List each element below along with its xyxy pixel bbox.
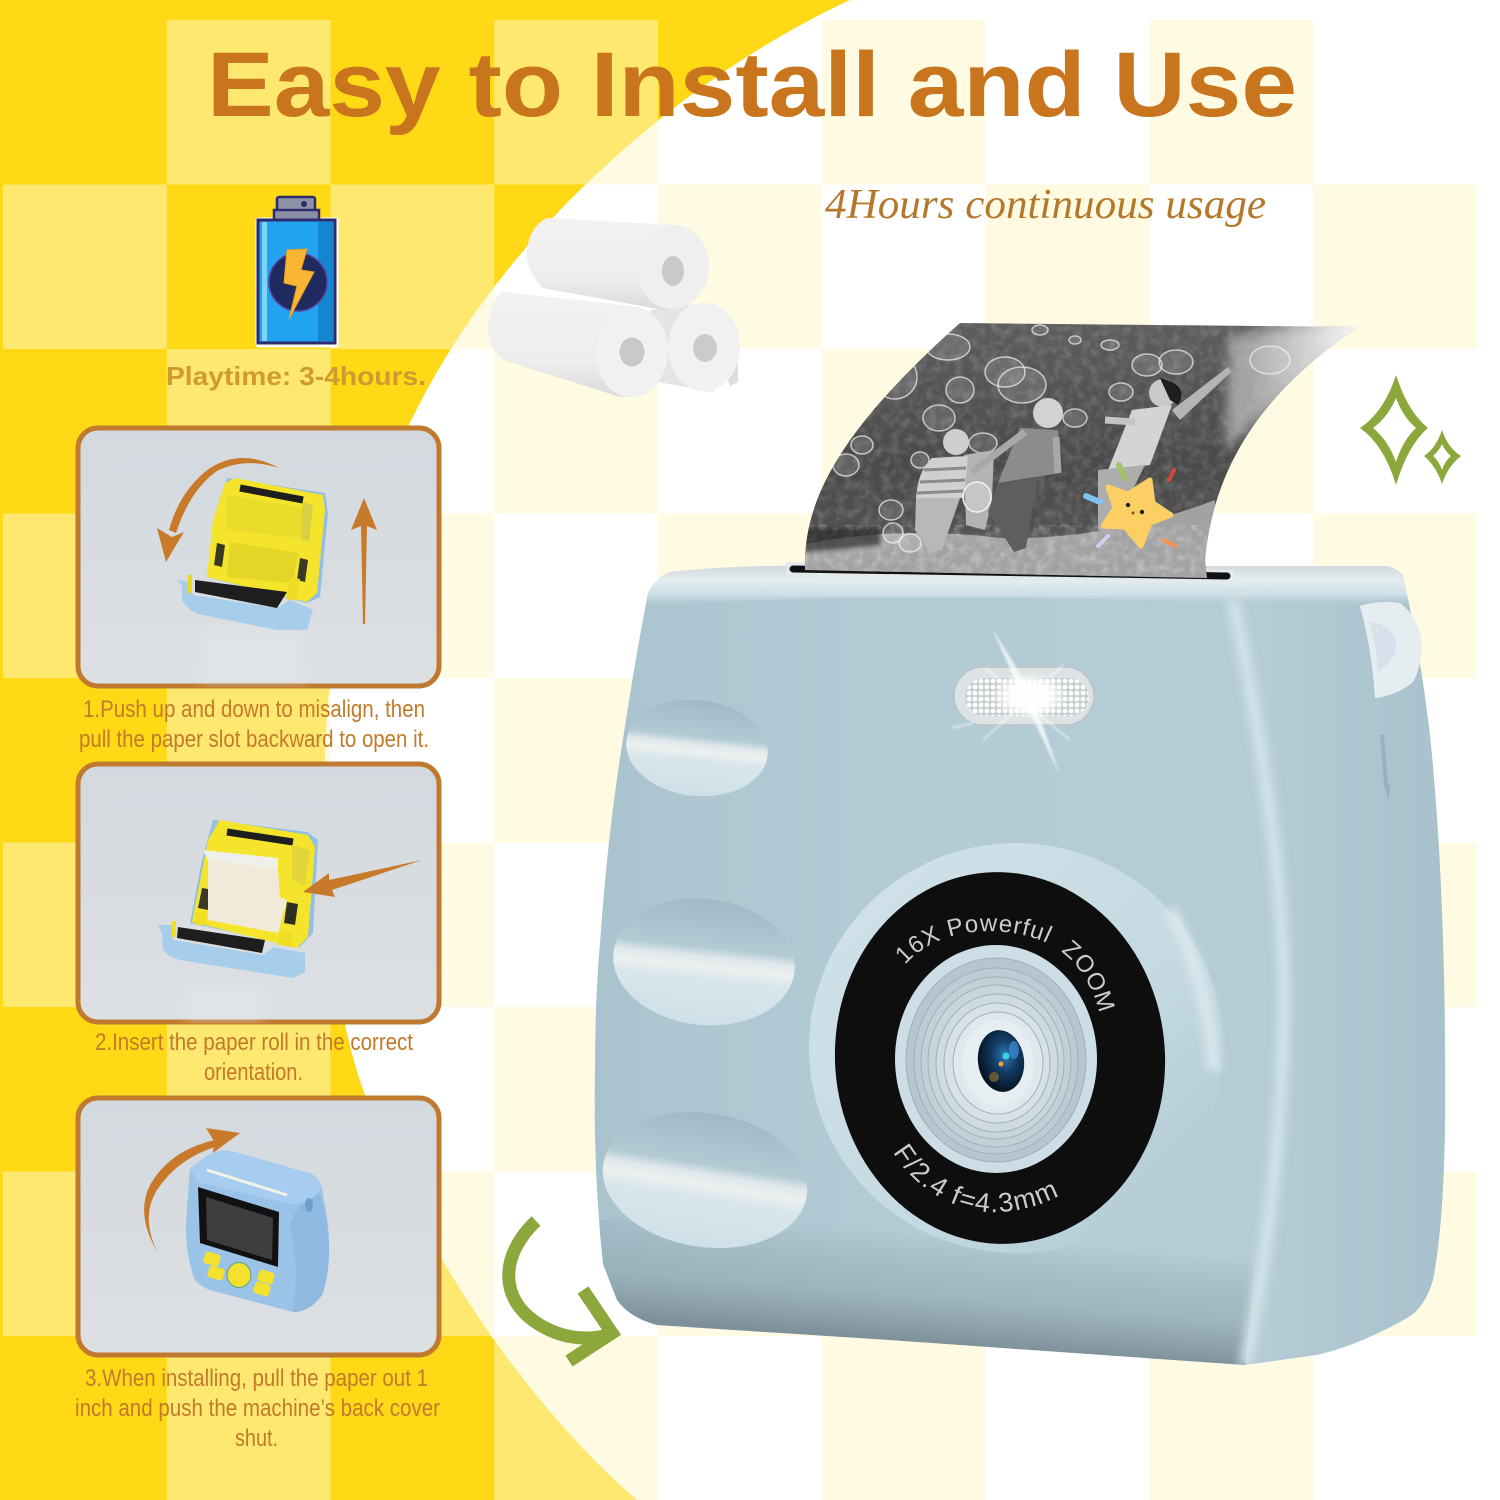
child striped shirt [915,429,969,552]
panel: step 2 insert paper roll [78,764,439,1022]
icon: three paper rolls [488,218,740,399]
battery caption: Playtime: 3-4hours. [166,361,426,391]
background: yellow curved area with checker [0,0,850,1500]
icon: sparkle stars [1360,375,1461,485]
paper slot [786,562,1234,584]
arrow: pointing to paper [303,860,422,897]
strap loop [1360,602,1422,698]
subtitle: usage time: 4Hours continuous usage [825,182,1266,228]
step 2 text [95,1029,413,1086]
printed photo sheet [790,315,1370,585]
children [915,367,1231,552]
lens text: F/2.4 f=4.3mm [894,1143,1058,1212]
panel: step 3 close back cover [78,1098,439,1355]
side mark [1380,735,1391,800]
arrow: curved push [144,1128,240,1253]
device with paper roll [158,820,318,978]
light trees fade [1218,326,1350,452]
icon: battery [256,197,338,348]
lens text [894,918,1115,1212]
step 3 text: inch and push the machine’s back cover [75,1395,440,1422]
camera body [594,562,1446,1365]
child right [1098,367,1231,540]
step 1 text: 1.Push up and down to misalign, then [83,696,425,723]
flash [952,628,1094,775]
arrow: up [351,498,377,624]
bubble in front [963,482,991,512]
step 2 text: 2.Insert the paper roll in the correct [95,1029,413,1056]
step 3 text: 3.When installing, pull the paper out 1 [85,1365,428,1392]
star sticker [1086,465,1176,546]
title: Easy to Install and Use [207,34,1297,136]
device closed, back screen [186,1151,329,1312]
right roll [650,302,740,392]
grass [800,500,1215,585]
step 1 text [79,696,429,753]
lens text: 16X Powerful ZOOM [896,918,1115,1012]
child behind [964,450,994,530]
left roll [488,292,670,399]
grips [593,693,817,1262]
step 3 text [75,1365,440,1452]
panel: step 1 open the paper slot [78,428,439,686]
arrow: green curved rotation [509,1221,612,1361]
arrow: curved rotate [157,458,279,562]
lens assembly [809,843,1224,1253]
child center [972,398,1063,552]
step 2 text: orientation. [204,1059,303,1086]
bubbles [833,325,1290,552]
step 1 text: pull the paper slot backward to open it. [79,726,429,753]
step 3 text: shut. [235,1425,278,1452]
device open with yellow interior [177,478,328,630]
top roll [527,218,713,312]
